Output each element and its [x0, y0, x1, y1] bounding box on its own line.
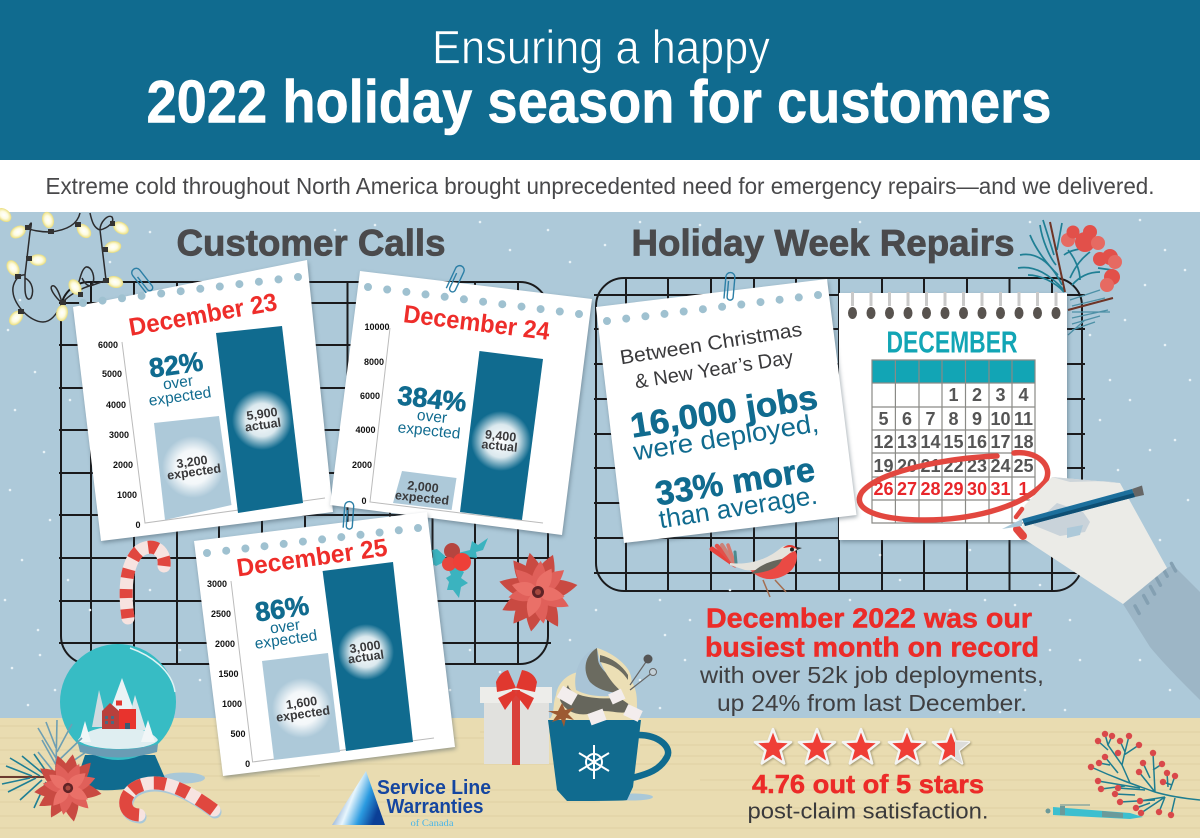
callout: 82% — [147, 346, 205, 384]
bar: actual — [460, 351, 543, 520]
axis: 5000 — [102, 369, 122, 379]
busiest month callout: December 2022 was our — [706, 602, 1032, 634]
card: jobs deployed note: Between Christmas — [618, 319, 804, 369]
axis: 500 — [230, 729, 246, 739]
wire grid: holiday week repairs — [594, 278, 1085, 591]
heading: holiday week repairs: Holiday Week Repairs — [632, 222, 1014, 264]
pen — [1046, 805, 1143, 819]
red circle around dates — [859, 453, 1048, 520]
subtitle: Extreme cold throughout North America brought unprecedented need for emergency repairs—and we delivered. — [46, 173, 1154, 199]
card: jobs deployed note — [596, 279, 856, 543]
value: actual: 5,900 — [246, 405, 279, 423]
card: December 24 — [330, 271, 592, 535]
value: expected: expected — [394, 488, 450, 508]
calendar dates: 12 — [873, 432, 894, 452]
gift box — [480, 670, 552, 765]
value: expected: 3,200 — [176, 453, 209, 471]
calendar dates: 16 — [967, 432, 987, 452]
calendar dates: 7 — [925, 409, 936, 429]
calendar month: DECEMBER — [886, 324, 1018, 360]
callout: expected — [148, 384, 212, 410]
axis: 1000 — [222, 699, 242, 709]
bar: expected — [393, 471, 456, 510]
value: actual: actual — [481, 437, 518, 455]
paper clip: card 23 — [130, 266, 154, 294]
callout: over — [269, 616, 301, 638]
calendar dates: 5 — [878, 409, 889, 429]
card: jobs deployed note: were deployed, — [630, 408, 821, 467]
bar: actual — [323, 562, 413, 751]
axis: 0 — [135, 520, 141, 530]
sky background — [0, 212, 1200, 718]
callout: over — [416, 407, 448, 427]
table shadow: globe — [161, 772, 205, 784]
value: expected — [394, 478, 450, 508]
value: actual — [471, 411, 531, 471]
card: jobs deployed note: & New Year’s Day — [633, 347, 795, 393]
title: 2022 holiday season for customers — [146, 68, 1052, 136]
pine branch: left — [0, 720, 86, 808]
hand and sleeve — [1002, 477, 1200, 700]
value: expected — [272, 678, 332, 738]
subtitle band — [0, 160, 1200, 212]
calendar dates: 4 — [1018, 385, 1029, 405]
snow dots — [5, 220, 1190, 712]
heading: customer calls: Customer Calls — [176, 222, 446, 264]
calendar dates: 21 — [920, 456, 941, 476]
calendar dates: 29 — [943, 479, 964, 499]
callout: expected — [254, 627, 318, 653]
calendar — [839, 292, 1067, 540]
paper clip: card 24 — [446, 264, 466, 293]
axis: 2000 — [215, 639, 235, 649]
calendar dates: 13 — [897, 432, 917, 452]
calendar dates: 1 — [948, 385, 959, 405]
header band — [0, 0, 1200, 160]
value: actual: actual — [347, 648, 385, 666]
heading: December 23 — [127, 288, 279, 342]
wood table top — [0, 718, 1200, 838]
value: expected: 1,600 — [285, 694, 318, 712]
logo: Warranties — [386, 796, 484, 818]
calendar dates — [873, 385, 1034, 499]
string lights — [0, 206, 131, 328]
value: expected — [162, 436, 224, 498]
heading: December 25 — [235, 534, 389, 582]
value: actual: 3,000 — [349, 638, 382, 656]
calendar dates: 6 — [902, 409, 912, 429]
calendar dates: 25 — [1013, 456, 1034, 476]
axis: 6000 — [360, 391, 380, 401]
wire grid: customer calls — [59, 282, 551, 664]
title: Ensuring a happy — [432, 20, 770, 74]
bar: expected — [154, 416, 232, 520]
callout — [147, 346, 212, 410]
berry branch — [1088, 731, 1200, 818]
calendar dates: 8 — [948, 409, 959, 429]
card: December 25 — [194, 512, 455, 776]
axis: 0 — [245, 759, 250, 769]
calendar dates: 2 — [972, 385, 982, 405]
callout — [253, 590, 318, 653]
holly — [431, 538, 488, 598]
axis: 1000 — [117, 490, 137, 500]
bird — [712, 545, 802, 597]
axis: 2500 — [211, 609, 231, 619]
card: December 23 — [73, 260, 333, 541]
value: expected: 2,000 — [407, 478, 439, 496]
axis: 6000 — [98, 340, 118, 350]
calendar dates: 11 — [1014, 409, 1033, 429]
callout — [396, 380, 468, 443]
paper clip: jobs note — [724, 272, 735, 300]
snow globe — [60, 644, 176, 790]
calendar dates: 27 — [897, 479, 917, 499]
cocoa mug — [548, 648, 668, 801]
calendar dates: 28 — [920, 479, 941, 499]
calendar dates: 31 — [990, 479, 1011, 499]
calendar header — [872, 360, 1035, 383]
calendar dates: 24 — [990, 456, 1011, 476]
axis: 4000 — [355, 425, 376, 435]
axis: 8000 — [364, 357, 384, 367]
bar: expected — [262, 653, 340, 760]
axis: 2000 — [113, 460, 133, 470]
axis — [207, 579, 434, 769]
calendar dates: 26 — [873, 479, 894, 499]
rating text: post-claim satisfaction. — [748, 798, 988, 824]
rating text: 4.76 out of 5 stars — [752, 769, 984, 799]
busiest month callout: busiest month on record — [705, 632, 1039, 662]
calendar dates: 30 — [967, 479, 987, 499]
axis: 4000 — [106, 400, 126, 410]
calendar dates: 20 — [897, 456, 917, 476]
rating text — [748, 769, 988, 824]
card: jobs deployed note: 16,000 jobs — [628, 378, 820, 446]
candy cane: hanging — [126, 547, 164, 618]
pine and berries: top right — [1018, 220, 1122, 335]
calendar dates: 9 — [972, 409, 982, 429]
callout: 384% — [396, 380, 468, 418]
paper clip: card 25 — [343, 501, 354, 529]
axis: 3000 — [207, 579, 227, 589]
calendar dates: 3 — [995, 385, 1006, 405]
card: jobs deployed note: 33% more — [653, 451, 817, 513]
axis: 0 — [361, 496, 367, 506]
busiest month callout: with over 52k job deployments, — [699, 662, 1044, 688]
calendar dates: 1 — [1018, 479, 1029, 499]
poinsettia: right — [497, 551, 579, 633]
axis — [352, 322, 543, 523]
callout: 86% — [253, 590, 311, 628]
axis: 2000 — [352, 460, 372, 470]
candy cane: on table — [126, 783, 215, 817]
calendar dates: 10 — [990, 409, 1011, 429]
value: actual: actual — [244, 416, 282, 434]
callout: expected — [397, 419, 461, 443]
busiest month callout: up 24% from last December. — [717, 690, 1027, 716]
axis: 3000 — [109, 430, 129, 440]
axis: 10000 — [364, 322, 390, 332]
logo: of Canada — [410, 818, 454, 829]
calendar dates: 19 — [873, 456, 894, 476]
title — [146, 20, 1052, 136]
logo — [332, 771, 491, 829]
callout: over — [162, 372, 194, 394]
calendar dates: 17 — [990, 432, 1011, 452]
heading: December 24 — [402, 300, 551, 346]
axis — [98, 340, 325, 530]
value: actual — [232, 390, 292, 450]
bar: actual — [216, 326, 303, 513]
value: actual — [338, 624, 394, 680]
calendar dates: 23 — [967, 456, 987, 476]
logo: Service Line — [377, 777, 491, 799]
value: expected: expected — [166, 461, 222, 483]
card: jobs deployed note: than average. — [657, 480, 819, 534]
snowflake — [579, 745, 609, 779]
value: expected: expected — [275, 703, 331, 725]
calendar rings — [848, 292, 1060, 319]
calendar dates: 14 — [920, 432, 941, 452]
calendar dates: 18 — [1013, 432, 1034, 452]
calendar dates: 22 — [943, 456, 964, 476]
axis: 1500 — [218, 669, 239, 679]
calendar dates: 15 — [943, 432, 964, 452]
busiest month callout — [699, 602, 1044, 716]
poinsettia: left — [23, 743, 113, 833]
star rating — [755, 729, 969, 763]
value: actual: 9,400 — [484, 427, 517, 445]
